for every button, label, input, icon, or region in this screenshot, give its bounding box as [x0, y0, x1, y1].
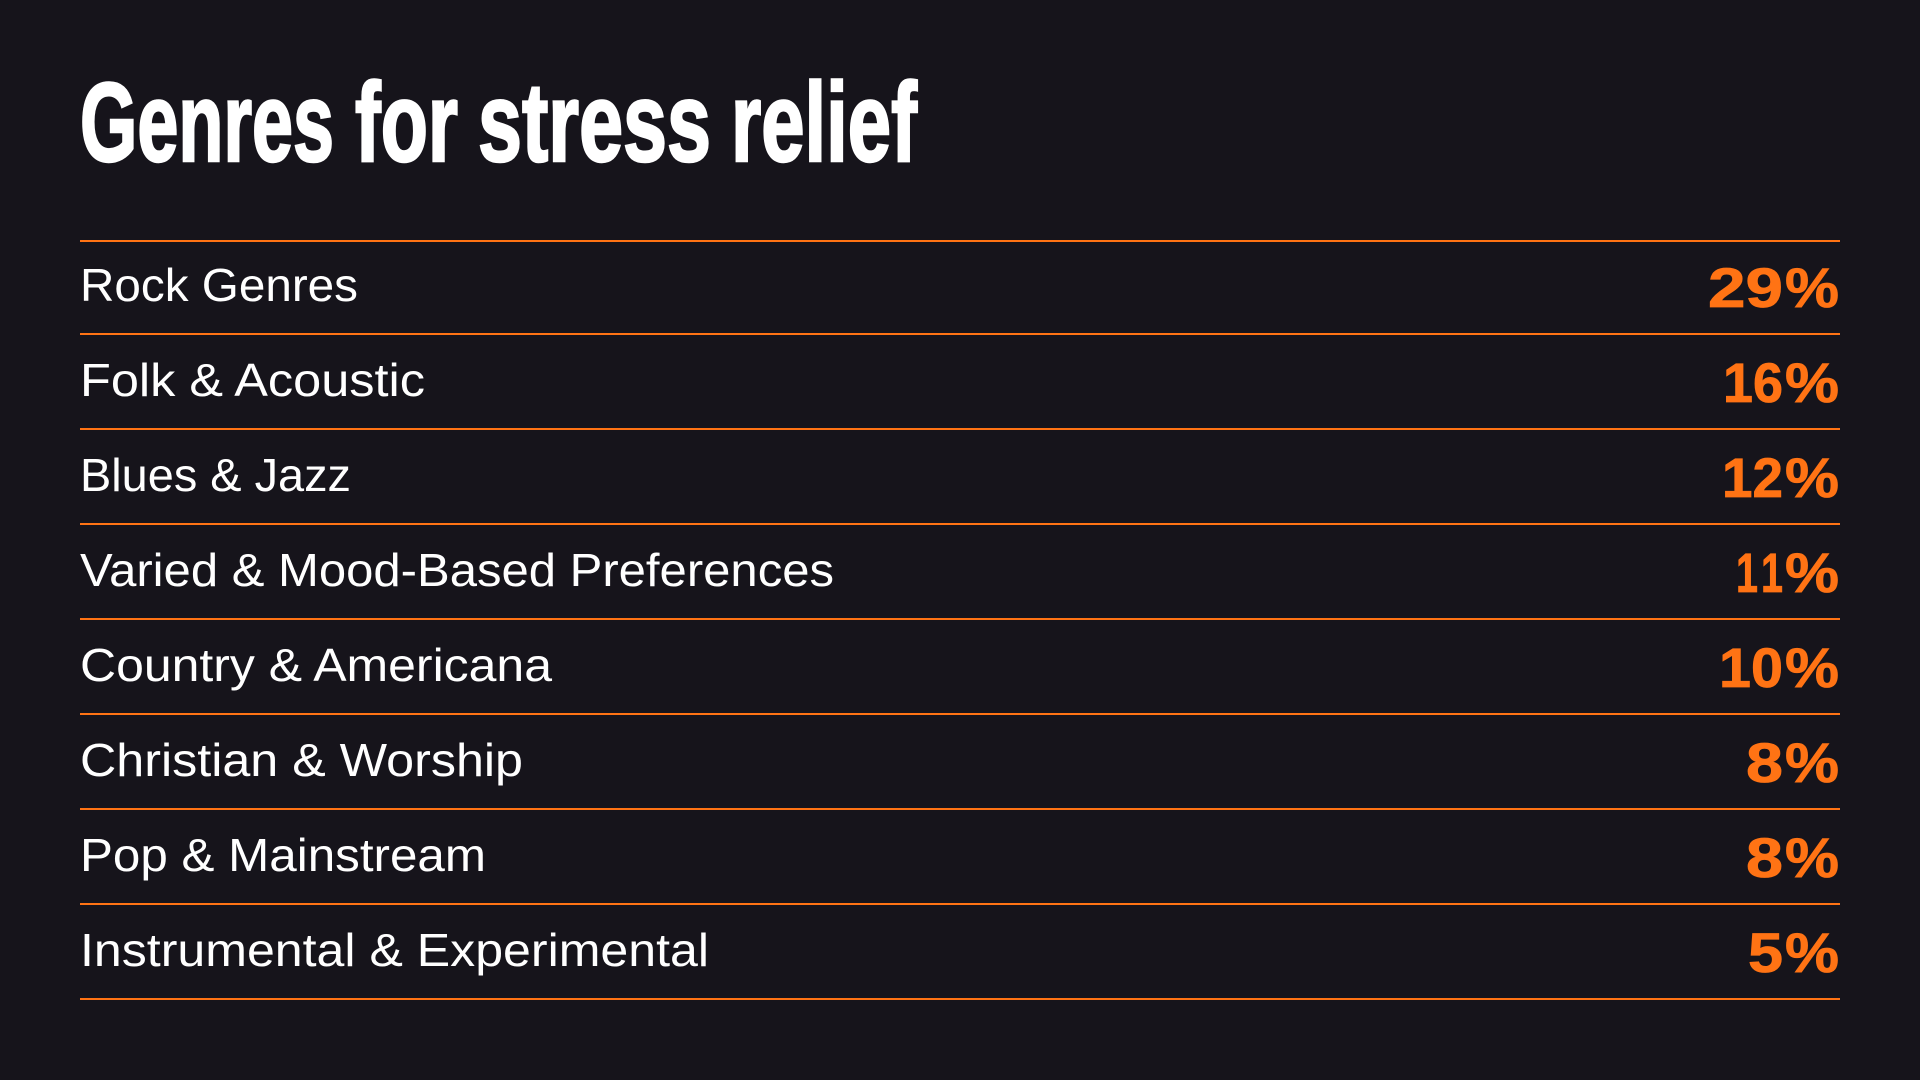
- label: Pop & Mainstream: Pop & Mainstream: [80, 829, 486, 881]
- value: 5%: %: [1785, 921, 1839, 984]
- value: 29%: 29: [1708, 256, 1783, 319]
- value: 11%: 1: [1761, 541, 1783, 604]
- row: Instrumental & Experimental: [80, 921, 1840, 999]
- value: 8%: 8: [1746, 731, 1783, 794]
- value: 10%: %: [1785, 636, 1839, 699]
- value: 10%: 10: [1719, 636, 1783, 699]
- value: 11%: %: [1785, 541, 1839, 604]
- label: Varied & Mood-Based Preferences: Varied & Mood-Based Preferences: [80, 544, 834, 596]
- label: Instrumental & Experimental: Instrumental & Experimental: [80, 924, 709, 976]
- value: 29%: %: [1785, 256, 1839, 319]
- title: relief: [731, 60, 917, 185]
- row: Christian & Worship: [80, 731, 1840, 809]
- row: Rock Genres: [80, 256, 1840, 334]
- row: Blues & Jazz: [80, 446, 1840, 524]
- value: 12%: %: [1785, 446, 1839, 509]
- table of genres: [80, 241, 1840, 999]
- title: Genres: [80, 60, 334, 185]
- value: 8%: 8: [1746, 826, 1783, 889]
- row: Pop & Mainstream: [80, 826, 1840, 904]
- title: stress: [478, 60, 711, 185]
- value: 16%: 16: [1723, 351, 1783, 414]
- row: Country & Americana: [80, 636, 1840, 714]
- value: 8%: %: [1785, 826, 1839, 889]
- label: Christian & Worship: Christian & Worship: [80, 734, 523, 786]
- label: Folk & Acoustic: Folk & Acoustic: [80, 354, 425, 406]
- row: Folk & Acoustic: [80, 351, 1840, 429]
- value: 16%: %: [1785, 351, 1839, 414]
- row: Varied & Mood-Based Preferences: [80, 541, 1840, 619]
- value: 8%: %: [1785, 731, 1839, 794]
- value: 5%: 5: [1748, 921, 1783, 984]
- label: Country & Americana: Country & Americana: [80, 639, 552, 691]
- value: 12%: 12: [1722, 446, 1783, 509]
- title: for: [355, 60, 458, 185]
- value: 11%: 1: [1736, 541, 1758, 604]
- label: Rock Genres: Rock Genres: [80, 259, 358, 311]
- label: Blues & Jazz: Blues & Jazz: [80, 449, 351, 501]
